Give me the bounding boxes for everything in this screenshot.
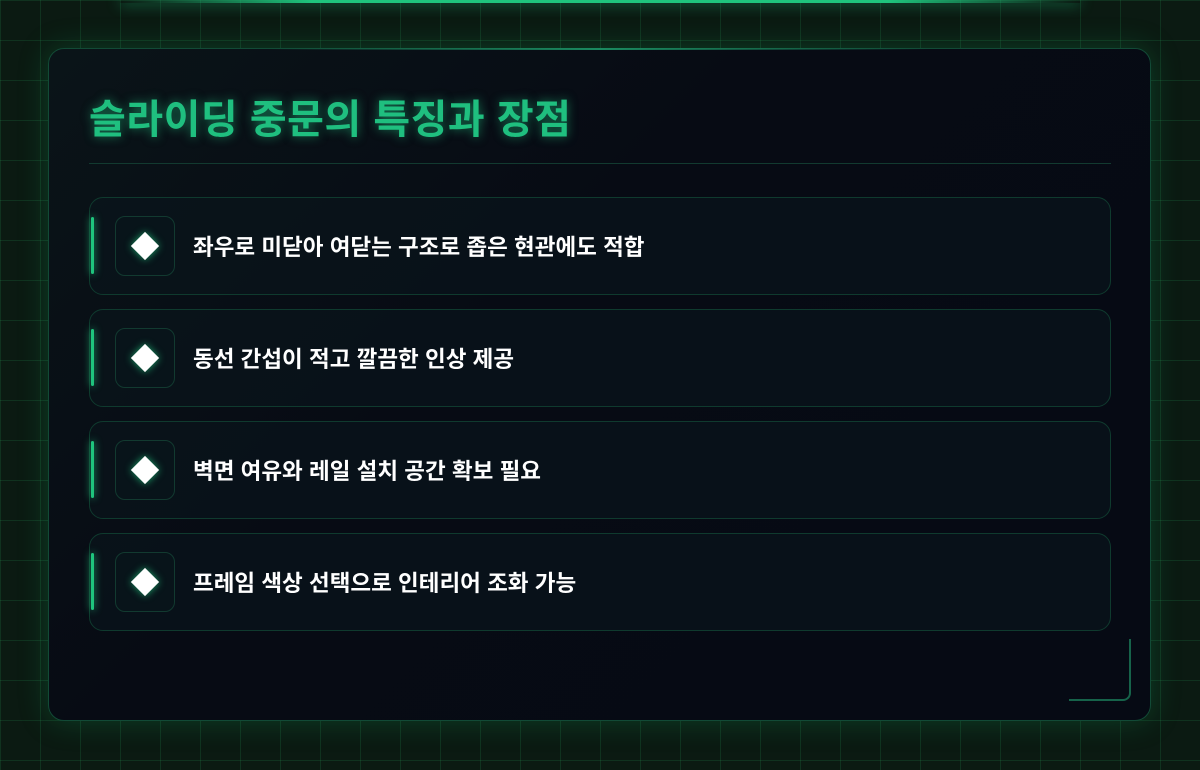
text 1: 좌우로 미닫아 여닫는 구조로 좁은 현관에도 적합: [193, 235, 645, 260]
item 3: [89, 421, 1111, 519]
icon: diamond: [115, 552, 175, 612]
title: 슬라이딩 중문의 특징과 장점: [89, 98, 571, 142]
icon: diamond: [115, 328, 175, 388]
icon: diamond: [115, 440, 175, 500]
item 4: [89, 533, 1111, 631]
text 3: 벽면 여유와 레일 설치 공간 확보 필요: [193, 459, 541, 484]
item 2: [89, 309, 1111, 407]
text 2: 동선 간섭이 적고 깔끔한 인상 제공: [193, 347, 514, 372]
corner bracket: [1069, 639, 1131, 701]
icon: diamond: [115, 216, 175, 276]
item 1: [89, 197, 1111, 295]
text 4: 프레임 색상 선택으로 인테리어 조화 가능: [193, 571, 576, 596]
